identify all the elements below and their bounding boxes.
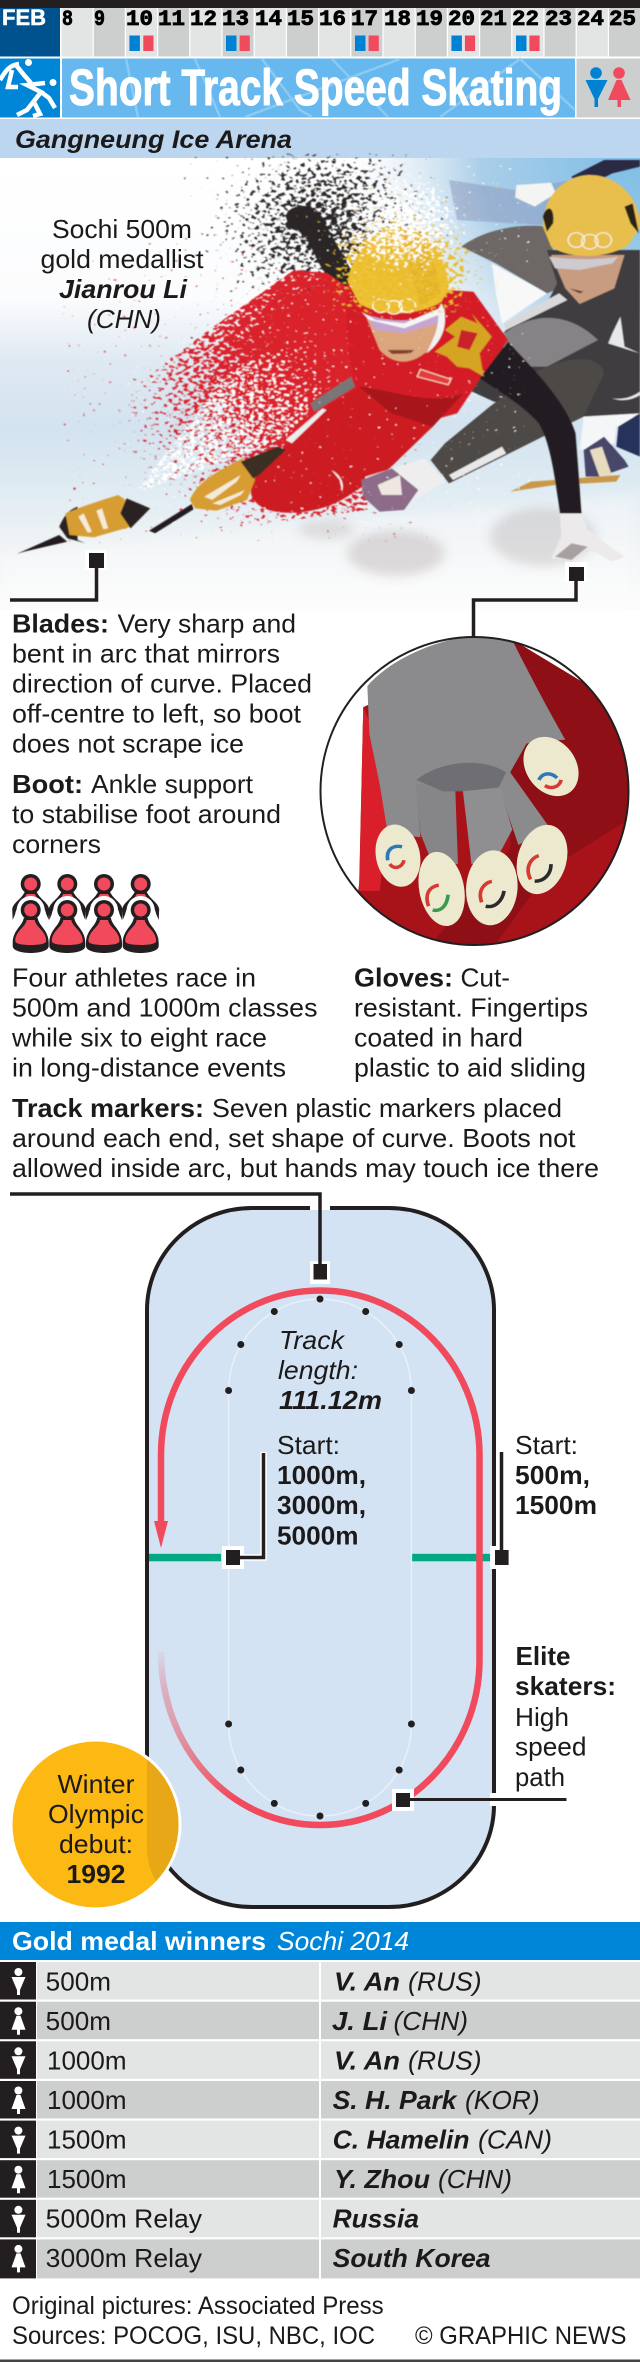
panel: photo of skaters <box>0 153 640 610</box>
text: boot <box>12 769 281 859</box>
text: blades: bent in arc that mirrors <box>12 638 280 668</box>
month label FEB: FEB <box>2 5 46 30</box>
elite skater path with arrow <box>154 1290 480 1825</box>
medal day markers <box>129 36 540 51</box>
fingertips <box>370 727 590 930</box>
label: start 1000m 3000m 5000m: 5000m <box>277 1520 358 1550</box>
day numbers: 12 <box>190 7 217 32</box>
row: men 1500m: (CAN) <box>478 2124 552 2154</box>
label: elite skaters: Elite <box>516 1641 570 1671</box>
table heading: Gold medal winners <box>12 1926 266 1956</box>
marker connector: start left <box>222 1452 264 1569</box>
day numbers: 25 <box>609 7 636 32</box>
row: men 1500m: C. Hamelin <box>333 2124 470 2154</box>
row: women 1500m: Y. Zhou <box>334 2164 430 2194</box>
panel: glove close-up circle <box>318 635 637 952</box>
callout: Winter Olympic debut 1992: Winter <box>58 1769 135 1799</box>
row: women 500m: J. Li <box>332 2006 388 2036</box>
day numbers: 21 <box>480 7 507 32</box>
label: start 1000m 3000m 5000m: Start: <box>277 1430 340 1460</box>
row: men 500m: (RUS) <box>408 1966 482 1996</box>
icon: short track skaters pictogram <box>0 58 60 118</box>
white helmet flecks <box>333 167 471 280</box>
text: boot: to stabilise foot around <box>12 799 281 829</box>
row: women 1500m: 1500m <box>47 2164 126 2194</box>
row: women 1500m <box>0 2160 640 2198</box>
text: track markers <box>12 1093 599 1183</box>
row: women 500m <box>0 2002 640 2039</box>
calendar strip <box>0 5 640 56</box>
text: blades: does not scrape ice <box>12 728 244 758</box>
row: men 500m <box>0 1962 640 2000</box>
day numbers: 22 <box>512 7 539 32</box>
bottom rule <box>0 2360 640 2362</box>
title banner <box>62 58 575 118</box>
day numbers: 17 <box>351 7 378 32</box>
text: boot: Boot: <box>12 769 83 799</box>
photo label: Sochi gold medallist: Jianrou Li <box>59 274 188 304</box>
row: men 1000m <box>0 2041 640 2079</box>
row: women 1000m: (KOR) <box>465 2085 540 2115</box>
text: blades: Blades: <box>12 608 109 638</box>
text: track markers: around each end, set shape of curve. Boots not <box>12 1123 576 1153</box>
table heading <box>0 1922 640 1960</box>
icons: men and women events <box>576 58 640 118</box>
main skater arm <box>480 342 582 513</box>
text: gloves: plastic to aid sliding <box>354 1052 586 1082</box>
label: start 500m 1500m <box>515 1430 597 1520</box>
callout: Winter Olympic debut 1992 <box>12 1742 182 1908</box>
day numbers: 24 <box>577 7 604 32</box>
text: gloves: resistant. Fingertips <box>354 992 588 1022</box>
row: women 500m: (CHN) <box>394 2006 468 2036</box>
month label FEB <box>0 5 60 56</box>
photo label: Sochi gold medallist: gold medallist <box>40 244 204 274</box>
row: men 1500m <box>0 2121 640 2158</box>
text: gloves: Gloves: <box>354 962 453 992</box>
text: track markers: Seven plastic markers placed <box>212 1093 562 1123</box>
text: gloves: coated in hard <box>354 1022 523 1052</box>
panel: gold medal winners table <box>0 1922 640 2278</box>
text: blades <box>12 608 312 758</box>
text: gloves: Cut- <box>460 962 510 992</box>
day numbers: 19 <box>416 7 443 32</box>
venue band <box>0 119 640 158</box>
background skater face <box>551 255 624 304</box>
label: track length: 111.12m <box>279 1385 382 1415</box>
row: men 500m: 500m <box>46 1966 111 1996</box>
background skater knee and boot <box>363 458 445 510</box>
main skater raised arm <box>286 206 351 287</box>
background skater <box>431 160 640 492</box>
white flecks in red spray <box>135 320 351 493</box>
text: boot: Ankle support <box>91 769 254 799</box>
row: women 1500m: (CHN) <box>438 2164 512 2194</box>
row: men 1000m: V. An <box>334 2046 400 2076</box>
label: elite skaters <box>515 1641 616 1792</box>
label: track length: length: <box>278 1355 358 1385</box>
day numbers <box>62 7 636 32</box>
label: elite skaters: speed <box>515 1732 586 1762</box>
text: athletes per race <box>11 962 318 1082</box>
inner marker track <box>229 1299 411 1816</box>
row: women 3000m relay: South Korea <box>333 2243 491 2273</box>
rink <box>147 1208 494 1907</box>
marker connector: elite path <box>392 1789 566 1811</box>
main skater torso and leg <box>347 283 508 423</box>
row: men 5000m relay <box>0 2200 640 2237</box>
label: start 500m 1500m: 500m, <box>515 1460 590 1490</box>
venue band: Gangneung Ice Arena <box>15 126 292 154</box>
credits: Original pictures: Associated Press <box>12 2292 384 2320</box>
day numbers: 10 <box>126 7 153 32</box>
ice reflections <box>0 493 640 610</box>
text: gloves <box>354 962 588 1082</box>
marker connector: top <box>10 1194 330 1284</box>
photo label: Sochi gold medallist: Sochi 500m <box>52 214 192 244</box>
row: men 1500m: 1500m <box>47 2124 126 2154</box>
chart: rink diagram <box>10 1194 616 1907</box>
day numbers: 14 <box>255 7 282 32</box>
day numbers: 18 <box>384 7 411 32</box>
connector: blades <box>10 550 107 600</box>
label: track length: Track <box>279 1325 346 1355</box>
day numbers: 20 <box>448 7 475 32</box>
label: start 500m 1500m: Start: <box>515 1430 578 1460</box>
top black bar <box>0 0 640 8</box>
credits <box>12 2292 626 2350</box>
text: boot: corners <box>12 829 101 859</box>
callout: Winter Olympic debut 1992: 1992 <box>66 1859 126 1889</box>
day numbers: 9 <box>94 7 105 32</box>
label: track length <box>278 1325 382 1415</box>
text: track markers: allowed inside arc, but hands may touch ice there <box>12 1153 599 1183</box>
start lines <box>149 1554 490 1561</box>
label: start 1000m 3000m 5000m <box>277 1430 366 1550</box>
day numbers: 23 <box>545 7 572 32</box>
callout: Winter Olympic debut 1992: debut: <box>59 1829 133 1859</box>
row: women 3000m relay: 3000m Relay <box>46 2243 202 2273</box>
row: men 500m: V. An <box>334 1966 400 1996</box>
row: men 5000m relay: 5000m Relay <box>46 2204 202 2234</box>
table heading: Sochi 2014 <box>277 1926 409 1956</box>
label: start 500m 1500m: 1500m <box>515 1490 597 1520</box>
day numbers: 15 <box>287 7 314 32</box>
row: women 1000m: 1000m <box>47 2085 126 2115</box>
row: women 1000m <box>0 2081 640 2118</box>
credits: © GRAPHIC NEWS <box>415 2322 626 2350</box>
connector: gloves <box>474 562 587 638</box>
track markers <box>225 1296 415 1820</box>
scattered particles <box>184 153 449 340</box>
row: women 500m: 500m <box>46 2006 111 2036</box>
label: start 1000m 3000m 5000m: 1000m, <box>277 1460 366 1490</box>
glove fingers <box>416 784 458 864</box>
label: elite skaters: skaters: <box>515 1671 616 1701</box>
day numbers: 11 <box>158 7 185 32</box>
text: athletes per race: Four athletes race in <box>12 962 256 992</box>
row: men 1000m: (RUS) <box>408 2046 482 2076</box>
row: men 5000m relay: Russia <box>333 2204 419 2234</box>
text: track markers: Track markers: <box>12 1093 204 1123</box>
row: women 3000m relay <box>0 2239 640 2278</box>
day numbers: 13 <box>222 7 249 32</box>
callout: Winter Olympic debut 1992: Olympic <box>48 1799 144 1829</box>
text: blades: Very sharp and <box>118 608 296 638</box>
text: athletes per race: in long-distance events <box>12 1052 286 1082</box>
icon: eight athletes <box>12 874 159 953</box>
row: men 1000m: 1000m <box>47 2046 126 2076</box>
label: elite skaters: High <box>515 1702 569 1732</box>
front skate boots and blades <box>149 504 193 533</box>
text: blades: direction of curve. Placed <box>12 668 312 698</box>
row: women 1000m: S. H. Park <box>333 2085 458 2115</box>
photo label: Sochi gold medallist <box>40 214 204 334</box>
text: blades: off-centre to left, so boot <box>12 698 302 728</box>
credits: Sources: POCOG, ISU, NBC, IOC <box>12 2322 375 2350</box>
dragon emblem and flag <box>435 313 492 377</box>
text: athletes per race: 500m and 1000m classes <box>12 992 318 1022</box>
day numbers: 8 <box>62 7 73 32</box>
day numbers: 16 <box>319 7 346 32</box>
golden helmet particles <box>310 173 506 313</box>
goggles, face and helmet <box>365 307 445 362</box>
label: elite skaters: path <box>515 1762 565 1792</box>
label: start 1000m 3000m 5000m: 3000m, <box>277 1490 366 1520</box>
text: athletes per race: while six to eight race <box>11 1022 267 1052</box>
marker connector: start right <box>490 1452 509 1569</box>
glove <box>367 636 565 845</box>
photo label: Sochi gold medallist: (CHN) <box>87 304 161 334</box>
